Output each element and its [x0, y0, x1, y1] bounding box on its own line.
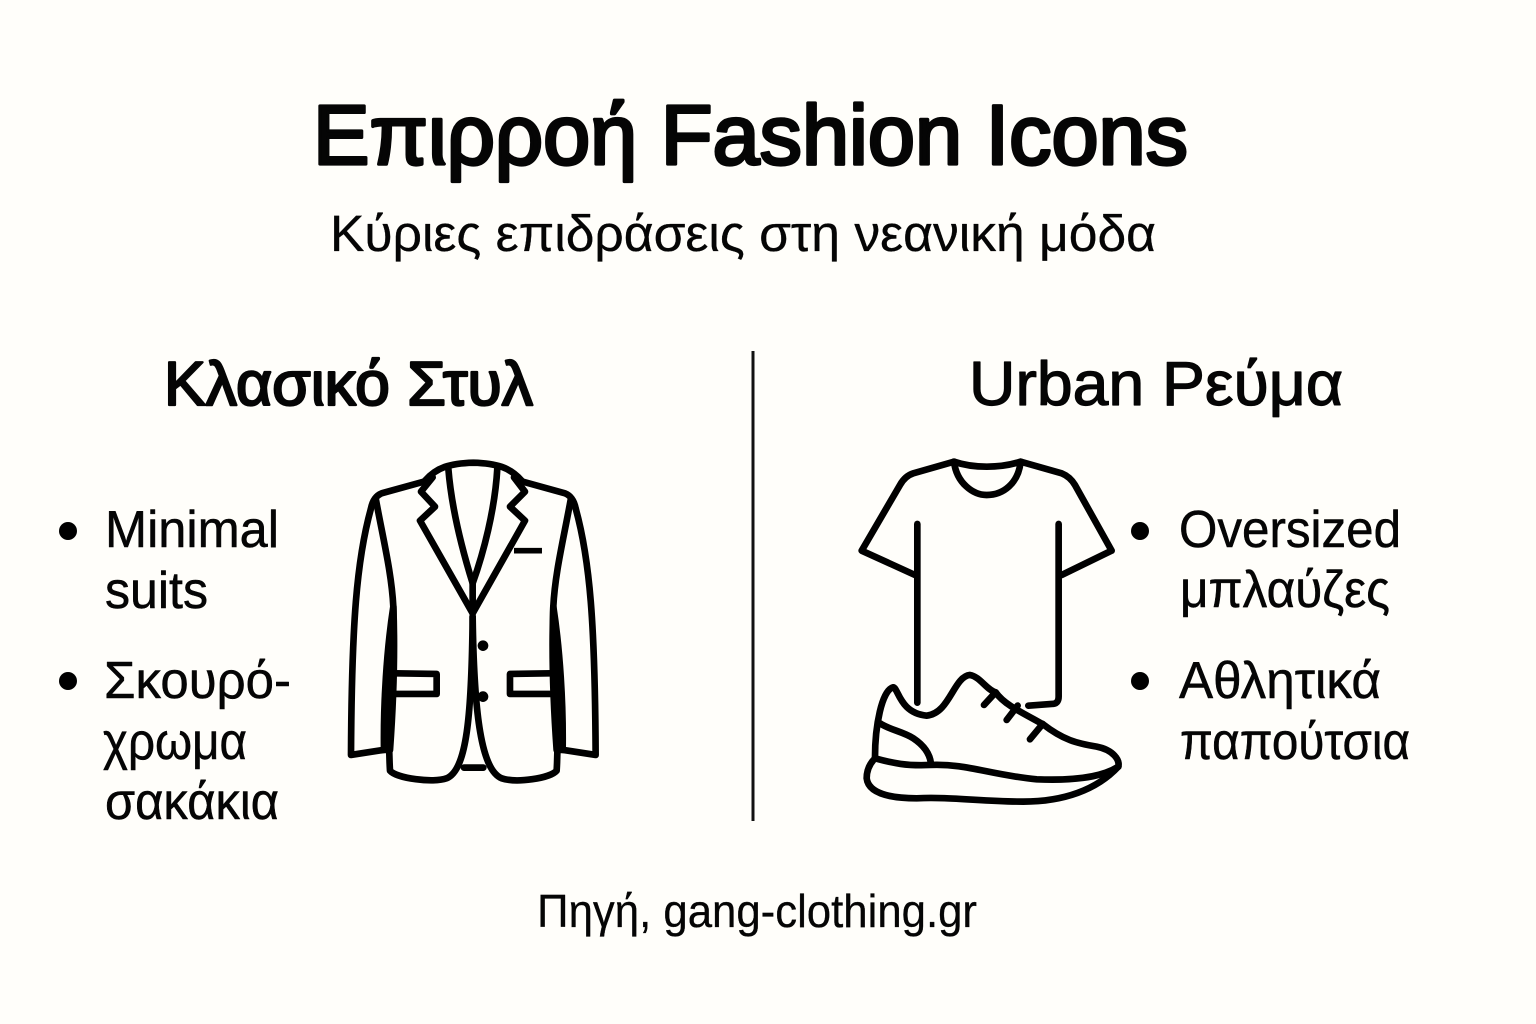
bullet: minimal suits: Minimal	[105, 501, 279, 559]
bullet: oversized blouses: Oversized	[1179, 501, 1401, 559]
heading: urban trend: Urban Ρεύμα	[969, 350, 1343, 419]
icon: blazer jacket	[351, 463, 596, 780]
source footer: Πηγή, gang-clothing.gr	[537, 885, 977, 937]
bullet: minimal suits: suits	[105, 562, 208, 620]
divider	[752, 351, 754, 821]
bullet: dark blazers	[59, 652, 291, 831]
icon: t-shirt and sneaker	[862, 462, 1119, 802]
bullet: oversized blouses	[1131, 501, 1401, 619]
heading: classic style: Κλασικό Στυλ	[164, 350, 533, 419]
icon: sneaker	[867, 675, 1119, 802]
panel: urban trend	[862, 350, 1410, 802]
subtitle: Κύριες επιδράσεις στη νεανική μόδα	[330, 205, 1156, 262]
bullet: sneakers	[1131, 652, 1410, 771]
bullet list: urban trend	[1131, 501, 1410, 771]
bullet: dark blazers: χρωμα	[103, 713, 247, 771]
bullet: sneakers: Αθλητικά	[1179, 652, 1381, 710]
bullet: minimal suits	[59, 501, 279, 620]
panel: classic style	[59, 350, 596, 831]
bullet: oversized blouses: μπλαύζες	[1180, 561, 1390, 619]
bullet: dark blazers: σακάκια	[105, 773, 279, 831]
bullet: sneakers: παπούτσια	[1180, 713, 1410, 771]
bullet: dark blazers: Σκουρό-	[104, 652, 291, 710]
title: Επιρροή Fashion Icons	[313, 88, 1188, 182]
bullet list: classic style	[59, 501, 291, 831]
icon: t-shirt	[862, 462, 1112, 706]
